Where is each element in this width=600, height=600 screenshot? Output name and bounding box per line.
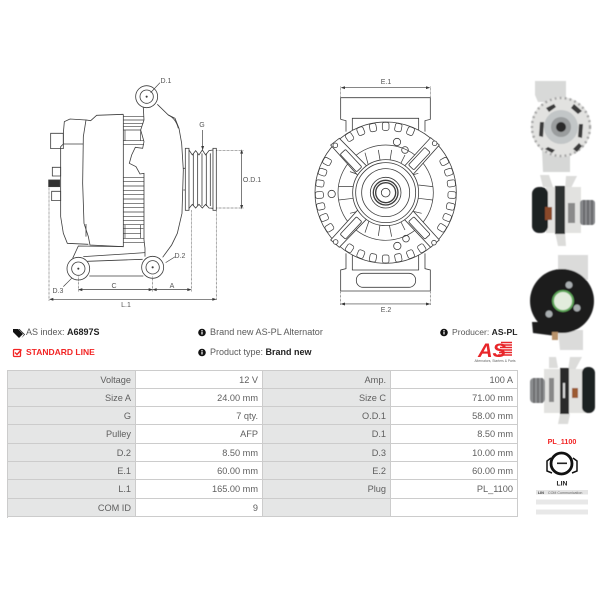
- specification table: 10.00 mm: [472, 448, 513, 458]
- connector pin table: LIN: [538, 491, 544, 495]
- front view technical drawing: [315, 87, 456, 305]
- icon: info producer: [440, 329, 448, 336]
- specification table: 60.00 mm: [472, 466, 513, 476]
- specification table: D.1: [372, 429, 386, 439]
- specification table: 71.00 mm: [472, 393, 513, 403]
- specification table: Pulley: [106, 429, 131, 439]
- side view dimension labels: L.1: [121, 302, 131, 309]
- specification table: 8.50 mm: [477, 429, 513, 439]
- specification table: Plug: [368, 484, 386, 494]
- icon: checked box: [14, 350, 22, 356]
- icon: info brand: [198, 329, 206, 336]
- connector pin table: [536, 490, 588, 514]
- specification table: E.1: [117, 466, 131, 476]
- AS-PL logo: [474, 341, 516, 363]
- specification table: Voltage: [100, 374, 131, 384]
- specification table: D.2: [117, 448, 131, 458]
- pulley: [183, 148, 216, 210]
- side view dimension labels: D.3: [53, 288, 64, 295]
- specification table: O.D.1: [362, 411, 386, 421]
- specification table: Size C: [359, 393, 386, 403]
- side view technical drawing: [49, 83, 243, 301]
- icon: tags: [13, 329, 25, 338]
- specification table: Amp.: [365, 374, 386, 384]
- side view dimension labels: D.1: [161, 78, 172, 85]
- specification table: PL_1100: [477, 484, 513, 494]
- product photo: side of alternator, pulley right: [532, 175, 595, 246]
- front view dimension labels: E.1: [381, 79, 391, 86]
- specification table: E.2: [372, 466, 386, 476]
- AS-PL logo: AS: [477, 341, 506, 362]
- outer housing with notches: [315, 122, 456, 263]
- connector name: LIN: [557, 480, 568, 488]
- AS-PL logo: Alternators, Starters & Parts: [474, 359, 516, 363]
- specification table: D.3: [372, 448, 386, 458]
- centre hub and shaft: [353, 160, 419, 226]
- diagonal mounting arms: [331, 138, 439, 247]
- specification table: 8.50 mm: [222, 448, 258, 458]
- top and bottom mounting blocks: [341, 98, 430, 291]
- specification table: 100 A: [489, 374, 513, 384]
- specification table: 165.00 mm: [212, 484, 258, 494]
- specification table: COM ID: [98, 503, 131, 513]
- specification table: Size A: [105, 393, 131, 403]
- front view dimension labels: E.2: [381, 307, 391, 314]
- plug code label: PL_1100: [548, 437, 576, 446]
- side view dimension labels: D.2: [175, 253, 186, 260]
- AS index: AS index: A6897S: [26, 327, 100, 337]
- icon: LIN connector: [547, 453, 577, 474]
- side view dimension labels: [53, 78, 261, 309]
- specification table: AFP: [240, 429, 258, 439]
- front view dimension labels: [381, 79, 391, 314]
- side view dimension labels: A: [170, 283, 175, 290]
- product photo: front of alternator: [531, 81, 591, 172]
- product photo: side of alternator, pulley left: [530, 357, 595, 424]
- cooling fins: [123, 117, 144, 243]
- specification table: G: [124, 411, 131, 421]
- specification table: L.1: [118, 484, 131, 494]
- specification table: 7 qty.: [236, 411, 258, 421]
- alternator body outline: [49, 104, 183, 257]
- specification table: [7, 370, 518, 518]
- standard line: STANDARD LINE: [26, 347, 95, 357]
- side view dimension labels: G: [199, 122, 205, 129]
- specification table: 58.00 mm: [472, 411, 513, 421]
- dimension lines: [49, 83, 243, 301]
- side view dimension labels: O.D.1: [243, 177, 261, 184]
- product photo: rear of alternator: [530, 255, 594, 350]
- side view dimension labels: C: [111, 283, 117, 290]
- specification table: 9: [253, 503, 258, 513]
- specification table: 60.00 mm: [217, 466, 258, 476]
- specification table: 24.00 mm: [217, 393, 258, 403]
- connector pin table: COM Communication: [548, 491, 582, 495]
- icon: info product type: [198, 349, 206, 356]
- producer: Producer: AS-PL: [452, 327, 517, 337]
- brand note: Brand new AS-PL Alternator: [210, 327, 323, 337]
- product type: Product type: Brand new: [210, 347, 312, 357]
- fan blades: [338, 145, 433, 240]
- lower bracket with D.2 and D.3: [67, 246, 164, 280]
- width dimensions: [341, 87, 430, 305]
- mounting ear D.1: [136, 86, 158, 108]
- specification table: 12 V: [239, 374, 258, 384]
